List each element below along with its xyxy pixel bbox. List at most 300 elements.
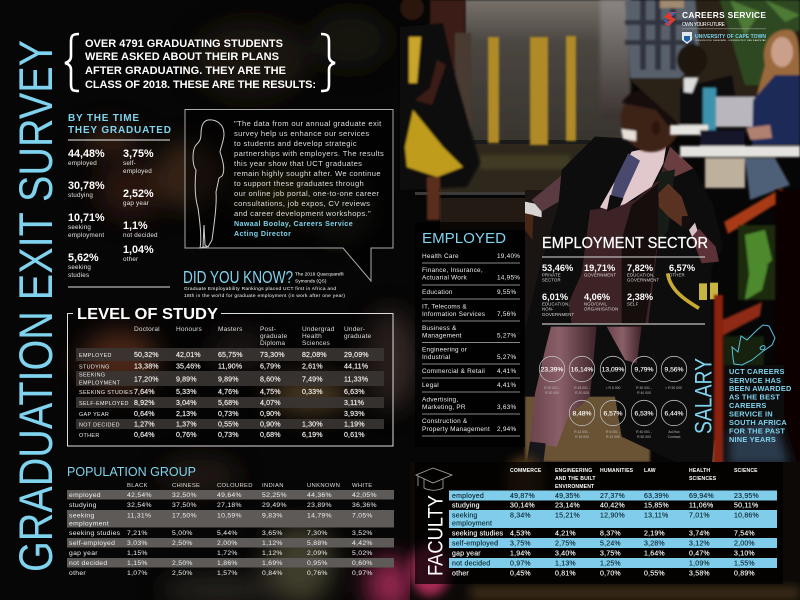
industry rows: Management bbox=[422, 332, 462, 340]
row: studying: 37,50% bbox=[172, 502, 197, 509]
row: seeking studies: 5,00% bbox=[172, 530, 193, 537]
row: studying: 44,11% bbox=[344, 362, 369, 370]
row: gap year: 0,73% bbox=[218, 410, 239, 418]
row: self-employed: 3,12% bbox=[689, 540, 710, 548]
row: other: OTHER bbox=[79, 433, 100, 439]
row: other: 0,84% bbox=[262, 570, 283, 577]
panel: by the time they graduated bbox=[68, 113, 171, 288]
row: gap year: 1,72% bbox=[217, 550, 238, 557]
row: studying: 11,90% bbox=[218, 362, 243, 370]
row: seeking studies: 7,30% bbox=[307, 530, 328, 537]
row: gap year: 1,15% bbox=[127, 550, 148, 557]
quote text: and career development workshops." bbox=[234, 209, 371, 218]
row: seeking employment: 7,05% bbox=[352, 512, 373, 520]
row: employed: EMPLOYED bbox=[79, 353, 112, 359]
quote text: partnerships with employers. The results bbox=[234, 149, 384, 158]
row: employed: 42,01% bbox=[176, 351, 201, 359]
row: employed: 82,08% bbox=[302, 351, 327, 359]
row: seeking employment: seeking bbox=[69, 512, 95, 520]
stat: self-employed: 3,75% bbox=[123, 148, 154, 160]
row: seeking employment: 14,79% bbox=[307, 512, 332, 520]
row: self-employed bbox=[76, 397, 384, 408]
row: seeking studies: 4,21% bbox=[555, 530, 576, 538]
award text: SERVICE HAS bbox=[729, 376, 781, 385]
heading: BY THE TIME bbox=[68, 113, 139, 124]
row: seeking studies: 4,75% bbox=[260, 388, 281, 396]
row: other: 0,55% bbox=[644, 570, 665, 578]
lapel drape bbox=[658, 169, 675, 243]
quote text: consultations, job expos, CV reviews bbox=[234, 199, 370, 208]
stat: self-employed bbox=[123, 148, 154, 175]
stat: self: SELF bbox=[627, 302, 639, 306]
stat: self: 2,38% bbox=[627, 292, 653, 302]
stat: seeking employment: employment bbox=[68, 232, 104, 239]
hand and cuff bbox=[525, 202, 542, 217]
shirt bbox=[600, 143, 667, 210]
row: studying: 50,11% bbox=[734, 502, 758, 510]
row: other: 0,64% bbox=[134, 431, 155, 439]
column headers: ENVIRONMENT bbox=[555, 484, 595, 490]
row: seeking employment: 15,21% bbox=[555, 512, 580, 520]
tie bbox=[607, 153, 640, 212]
award text: NINE YEARS bbox=[729, 435, 776, 444]
stat: seeking employment bbox=[68, 212, 105, 239]
gown bbox=[525, 137, 723, 467]
column headers: CHINESE bbox=[172, 483, 200, 489]
row: studying: 11,06% bbox=[689, 502, 713, 510]
row: studying: studying bbox=[452, 502, 480, 510]
row: other bbox=[79, 431, 365, 439]
speech bubble outline bbox=[185, 110, 393, 281]
industry rows: 4,41% bbox=[497, 382, 516, 389]
row: seeking employment: seeking bbox=[452, 512, 478, 520]
row: employed: 42,05% bbox=[352, 492, 377, 499]
row: employed bbox=[67, 490, 394, 500]
row: seeking studies: 8,37% bbox=[600, 530, 621, 538]
quote text: "The data from our annual graduate exit bbox=[234, 119, 382, 128]
heading: SALARY bbox=[690, 358, 718, 434]
row: other: 1,07% bbox=[127, 570, 148, 577]
row: not decided: 1,09% bbox=[689, 560, 710, 568]
row: not decided: 1,15% bbox=[127, 560, 148, 567]
row: not decided: 0,95% bbox=[307, 560, 328, 567]
graduate head bbox=[621, 88, 683, 152]
row: studying: 2,61% bbox=[302, 362, 323, 370]
people at table bbox=[625, 0, 800, 200]
stat: employed bbox=[68, 148, 105, 167]
row: other: 0,61% bbox=[344, 431, 365, 439]
award text: BEEN AWARDED bbox=[729, 384, 792, 393]
row: not decided: 2,50% bbox=[172, 560, 193, 567]
maroon sleeve bbox=[532, 170, 570, 212]
careers service logo: CAREERS SERVICE bbox=[682, 10, 766, 20]
row: self-employed: 2,50% bbox=[172, 540, 193, 547]
industry rows: 9,55% bbox=[497, 289, 516, 296]
row: gap year bbox=[452, 550, 755, 558]
row: other: other bbox=[69, 570, 86, 577]
row: seeking studies: 2,19% bbox=[644, 530, 665, 538]
column headers: Health bbox=[302, 333, 322, 340]
row: studying: 15,85% bbox=[644, 502, 669, 510]
row: employed: 23,95% bbox=[734, 493, 759, 500]
row: studying: 32,54% bbox=[127, 502, 152, 509]
row: not decided: 1,27% bbox=[134, 420, 155, 428]
heading: EMPLOYED bbox=[422, 230, 506, 247]
row: seeking employment: 9,83% bbox=[262, 512, 283, 520]
row: other: 0,73% bbox=[218, 431, 239, 439]
stat: employed: 44,48% bbox=[68, 148, 105, 160]
row: gap year: 1,12% bbox=[262, 550, 283, 557]
row: employed: 69,94% bbox=[689, 493, 714, 500]
row: seeking employment: EMPLOYMENT bbox=[79, 380, 121, 386]
award text: AS THE BEST bbox=[729, 392, 780, 402]
row: self-employed: 2,00% bbox=[217, 540, 238, 547]
salary bands: Ad-Hoc bbox=[668, 430, 680, 434]
row: other: 0,81% bbox=[555, 570, 576, 578]
award text: UCT CAREERS bbox=[729, 367, 785, 376]
stat: other bbox=[123, 244, 154, 263]
row: seeking studies: 3,74% bbox=[689, 530, 710, 538]
column headers: Post- bbox=[260, 326, 276, 333]
industry rows: Health Care bbox=[422, 253, 459, 260]
stat: private sector bbox=[542, 263, 573, 282]
stat: other: 1,04% bbox=[123, 244, 154, 256]
stat: seeking studies bbox=[68, 252, 99, 279]
stat: government bbox=[584, 263, 617, 278]
stat: education government: 7,82% bbox=[627, 263, 653, 273]
row: employed: 49,64% bbox=[217, 492, 242, 499]
row: not decided: 1,19% bbox=[344, 420, 365, 428]
trouser legs bbox=[530, 327, 597, 447]
salary percentages: 23,39% bbox=[541, 366, 563, 374]
column headers: HEALTH bbox=[689, 468, 710, 474]
row: seeking employment: 9,89% bbox=[218, 376, 239, 384]
row: studying: 29,49% bbox=[262, 502, 287, 509]
intro text: WERE ASKED ABOUT THEIR PLANS bbox=[85, 51, 279, 63]
row: self-employed: 3,28% bbox=[644, 540, 665, 548]
industry rows: 14,95% bbox=[497, 274, 520, 282]
row: other: 0,70% bbox=[600, 570, 621, 578]
industry rows: IT, Telecoms & bbox=[422, 304, 467, 310]
row: gap year: 3,40% bbox=[555, 550, 576, 558]
column headers: COLOURED bbox=[217, 483, 253, 489]
column headers: Sciences bbox=[302, 340, 331, 347]
did you know: Graduate Employability Rankings placed UCT first in Africa and bbox=[184, 286, 336, 292]
stat: private sector: SECTOR bbox=[542, 278, 561, 282]
salary percentages: 9,79% bbox=[635, 366, 654, 374]
salary bands: R 30 001 - bbox=[636, 386, 652, 390]
quote text: to students and develop strategic bbox=[234, 139, 357, 148]
row: studying bbox=[79, 362, 369, 370]
row: seeking studies: 4,53% bbox=[510, 530, 531, 538]
row: employed: 73,30% bbox=[260, 351, 285, 359]
award text: SOUTH AFRICA bbox=[729, 418, 787, 427]
row: studying: 27,18% bbox=[217, 502, 242, 509]
left brace bbox=[65, 34, 79, 91]
stat: private sector: PRIVATE bbox=[542, 272, 561, 278]
row: gap year: 0,47% bbox=[689, 550, 710, 558]
row: gap year bbox=[69, 550, 373, 557]
row: self-employed bbox=[67, 538, 394, 548]
row: gap year: 3,75% bbox=[600, 550, 621, 558]
column headers: LAW bbox=[644, 468, 656, 474]
row: other: other bbox=[452, 570, 469, 578]
column headers: graduate bbox=[260, 333, 287, 340]
right hand bbox=[658, 183, 688, 227]
industry rows: Information Services bbox=[422, 311, 485, 318]
stat: seeking studies: studies bbox=[68, 272, 89, 279]
column headers: ENGINEERING bbox=[555, 468, 592, 474]
did you know: The 2019 Quacquarelli bbox=[295, 272, 344, 278]
row: gap year: 0,64% bbox=[134, 410, 155, 418]
row: self-employed: 3,75% bbox=[510, 540, 531, 548]
industry rows: 7,56% bbox=[497, 311, 516, 318]
award callout with south africa map bbox=[729, 325, 792, 444]
woman in gown bbox=[400, 0, 480, 220]
stat: government: GOVERNMENT bbox=[584, 272, 617, 278]
careers service logo: OWN YOUR FUTURE bbox=[682, 22, 726, 28]
panel: salary circles: 8,48% bbox=[573, 410, 592, 418]
quote attribution: Nawaal Boolay, Careers Service bbox=[234, 220, 353, 228]
vertical heading: FACULTY bbox=[424, 495, 448, 576]
intro text: OVER 4791 GRADUATING STUDENTS bbox=[85, 38, 283, 50]
row: gap year: gap year bbox=[69, 550, 98, 557]
row: other: 0,76% bbox=[176, 431, 197, 439]
row: employed: 49,35% bbox=[555, 493, 580, 500]
stat: self bbox=[627, 292, 653, 306]
industry rows: 19,40% bbox=[497, 253, 520, 260]
row: gap year bbox=[79, 410, 365, 418]
right brace bbox=[321, 34, 335, 91]
panel: employed industries bbox=[415, 222, 525, 447]
row: not decided: 1,69% bbox=[262, 560, 283, 567]
column headers: Undergrad bbox=[302, 326, 335, 333]
graduate man bbox=[525, 137, 723, 467]
row: seeking employment: 11,33% bbox=[344, 376, 369, 384]
row: seeking employment: employment bbox=[69, 520, 109, 528]
row: not decided: 0,55% bbox=[218, 420, 239, 428]
row: not decided bbox=[67, 558, 394, 568]
row: employed: 50,32% bbox=[134, 351, 159, 359]
banisters and plant bbox=[714, 188, 800, 470]
salary bands: Contract bbox=[668, 435, 680, 439]
row: studying: 23,14% bbox=[555, 502, 580, 510]
column headers: WHITE bbox=[352, 483, 372, 489]
row: other: 0,45% bbox=[510, 570, 531, 578]
lower left floor beside graduate bbox=[525, 190, 565, 460]
industry rows bbox=[422, 253, 522, 436]
did you know: Symonds (QS) bbox=[295, 278, 327, 284]
industry rows: Commercial & Retail bbox=[422, 368, 485, 375]
column headers: graduate bbox=[344, 333, 371, 340]
row: other: 2,50% bbox=[172, 570, 193, 577]
quote text: remain highly sought after. We continue bbox=[234, 169, 381, 178]
yellow hood trim bbox=[668, 273, 699, 308]
salary bands: R 15 001 - bbox=[574, 386, 590, 390]
row: seeking studies: seeking studies bbox=[452, 530, 504, 538]
panel background bbox=[415, 462, 783, 584]
row: employed: 52,25% bbox=[262, 492, 287, 499]
industry rows: Construction & bbox=[422, 418, 468, 425]
stat: education non-government: EDUCATION, bbox=[542, 302, 570, 306]
row: self-employed: 5,68% bbox=[218, 399, 239, 407]
row: gap year: GAP YEAR bbox=[79, 412, 109, 418]
row: employed: 49,87% bbox=[510, 493, 535, 500]
row: seeking studies: 5,44% bbox=[217, 530, 238, 537]
stat: not decided: 1,1% bbox=[123, 220, 148, 232]
column headers: UNKNOWN bbox=[307, 483, 340, 489]
stat: gap year bbox=[123, 188, 154, 207]
row: seeking employment: employment bbox=[452, 520, 492, 528]
row: employed: 32,50% bbox=[172, 492, 197, 499]
quote callout bbox=[185, 110, 393, 281]
panel: salary circles: 6,57% bbox=[604, 410, 623, 418]
row: seeking employment: 10,59% bbox=[217, 512, 242, 520]
heading: LEVEL OF STUDY bbox=[77, 306, 218, 323]
did you know bbox=[183, 267, 345, 299]
row: studying: 13,38% bbox=[134, 362, 159, 370]
salary bands: R 12 000 bbox=[606, 435, 620, 439]
stat: education non-government: 6,01% bbox=[542, 292, 568, 302]
row: studying: 40,42% bbox=[600, 502, 625, 510]
row: not decided: 1,13% bbox=[555, 560, 576, 568]
row: seeking studies: SEEKING STUDIES bbox=[79, 390, 133, 396]
quote text: survey help us enhance our services bbox=[234, 129, 370, 138]
salary bands: R 15 000 bbox=[575, 435, 589, 439]
row: self-employed: 3,11% bbox=[344, 399, 365, 407]
row: not decided: 1,25% bbox=[600, 560, 621, 568]
cobbled floor bbox=[525, 395, 718, 465]
row: employed: 42,54% bbox=[127, 492, 152, 499]
stat: not decided bbox=[123, 220, 158, 239]
row: seeking employment: 7,49% bbox=[302, 376, 323, 384]
panel: level of study table bbox=[68, 306, 393, 446]
stat: ngo bbox=[584, 292, 618, 312]
industry rows: 5,27% bbox=[497, 332, 516, 340]
row: seeking employment: SEEKING bbox=[79, 372, 105, 378]
stat: other bbox=[669, 263, 695, 278]
row: self-employed: 5,88% bbox=[307, 540, 328, 547]
row: studying bbox=[69, 502, 377, 509]
panel: salary circles bbox=[539, 356, 718, 439]
industry rows: Business & bbox=[422, 325, 457, 332]
careers service logo: IYUNIVESITHI YASEKAPA · UNIVERSITEIT VAN KAAPSTAD bbox=[695, 39, 766, 42]
crowd left blurred bbox=[80, 10, 416, 600]
column headers: Masters bbox=[218, 326, 243, 333]
row: seeking employment: 7,01% bbox=[689, 512, 710, 520]
stage wall bbox=[465, 0, 630, 145]
row: seeking employment: 10,86% bbox=[734, 512, 759, 520]
row: studying bbox=[452, 502, 758, 510]
panel: faculty table bbox=[415, 462, 783, 584]
award text: FOR THE PAST bbox=[729, 426, 785, 436]
column headers: Under- bbox=[344, 326, 365, 333]
panel background bbox=[415, 222, 525, 447]
row: seeking employment: 17,20% bbox=[134, 376, 159, 384]
row: studying: 36,36% bbox=[352, 502, 377, 509]
row: self-employed: self-employed bbox=[69, 540, 115, 547]
stat: seeking studies: 5,62% bbox=[68, 252, 99, 264]
industry rows: 5,27% bbox=[497, 354, 516, 361]
row: not decided: 0,90% bbox=[260, 420, 281, 428]
icon: graduation cap bbox=[416, 468, 452, 490]
row: gap year: 0,90% bbox=[260, 410, 281, 418]
column headers: HUMANITIES bbox=[600, 468, 634, 474]
salary bands: R 20 000 bbox=[575, 391, 589, 395]
industry rows: 2,94% bbox=[497, 426, 516, 433]
stat: self-employed: self- bbox=[123, 160, 136, 167]
row: studying: 23,89% bbox=[307, 502, 332, 509]
row: not decided: 1,86% bbox=[217, 560, 238, 567]
jacket bbox=[568, 147, 693, 323]
row: not decided: 0,97% bbox=[510, 560, 531, 568]
column headers: SCIENCE bbox=[734, 468, 758, 474]
industry rows: Marketing, PR bbox=[422, 404, 466, 411]
row: other bbox=[69, 570, 373, 577]
salary bands: R 20 001 - bbox=[544, 386, 560, 390]
row: employed: 65,75% bbox=[218, 351, 243, 359]
panel frame bbox=[68, 314, 393, 446]
salary bands: R 50 000 bbox=[637, 435, 651, 439]
stat: seeking employment: 10,71% bbox=[68, 212, 105, 224]
stat: studying: 30,78% bbox=[68, 180, 105, 192]
row: employed: 44,36% bbox=[307, 492, 332, 499]
row: seeking employment: 8,60% bbox=[260, 376, 281, 384]
row: seeking employment bbox=[67, 510, 394, 528]
row: seeking employment: 11,31% bbox=[127, 512, 151, 520]
row: other: 0,89% bbox=[734, 570, 755, 578]
stat: education non-government: GOVERNMENT bbox=[542, 312, 575, 317]
quote text: to support these graduates through bbox=[234, 179, 364, 188]
row: gap year: 2,09% bbox=[307, 550, 328, 557]
row: other: 0,68% bbox=[260, 431, 281, 439]
row: seeking studies: 5,33% bbox=[176, 388, 197, 396]
row: seeking studies bbox=[79, 388, 365, 396]
salary bands: R 6 001 - bbox=[606, 430, 620, 434]
stat: education government: GOVERNMENT bbox=[627, 278, 660, 282]
row: not decided: 0,60% bbox=[352, 560, 373, 567]
row: seeking studies: seeking studies bbox=[69, 530, 121, 537]
did you know: DID YOU KNOW? bbox=[183, 267, 293, 287]
row: seeking studies: 3,65% bbox=[262, 530, 283, 537]
row: employed: employed bbox=[69, 492, 101, 499]
stat: other: 6,57% bbox=[669, 263, 695, 273]
row: gap year: 2,13% bbox=[176, 410, 197, 418]
stat: studying: studying bbox=[68, 192, 93, 199]
heading: EMPLOYMENT SECTOR bbox=[542, 235, 708, 252]
industry rows: Legal bbox=[422, 382, 439, 389]
heading: POPULATION GROUP bbox=[67, 464, 196, 479]
row: self-employed: 4,42% bbox=[352, 540, 373, 547]
row: studying: 6,79% bbox=[260, 362, 281, 370]
stat: seeking employment: seeking bbox=[68, 224, 91, 231]
row: gap year: 3,93% bbox=[344, 410, 365, 418]
row: gap year: gap year bbox=[452, 550, 481, 558]
industry rows: Actuarial Work bbox=[422, 274, 467, 282]
stat: other: OTHER bbox=[669, 272, 685, 278]
industry rows: Engineering or bbox=[422, 346, 468, 354]
stat: gap year: gap year bbox=[123, 200, 149, 207]
industry rows: Property Management bbox=[422, 426, 490, 433]
row: seeking studies: 6,63% bbox=[344, 388, 365, 396]
row: seeking studies: 7,64% bbox=[134, 388, 155, 396]
lower tables bbox=[410, 462, 800, 600]
row: seeking studies: 7,21% bbox=[127, 530, 148, 537]
row: not decided: NOT DECIDED bbox=[79, 422, 120, 428]
heading: THEY GRADUATED bbox=[68, 125, 171, 136]
row: gap year: 1,64% bbox=[644, 550, 665, 558]
row: seeking employment: 13,11% bbox=[644, 512, 668, 520]
